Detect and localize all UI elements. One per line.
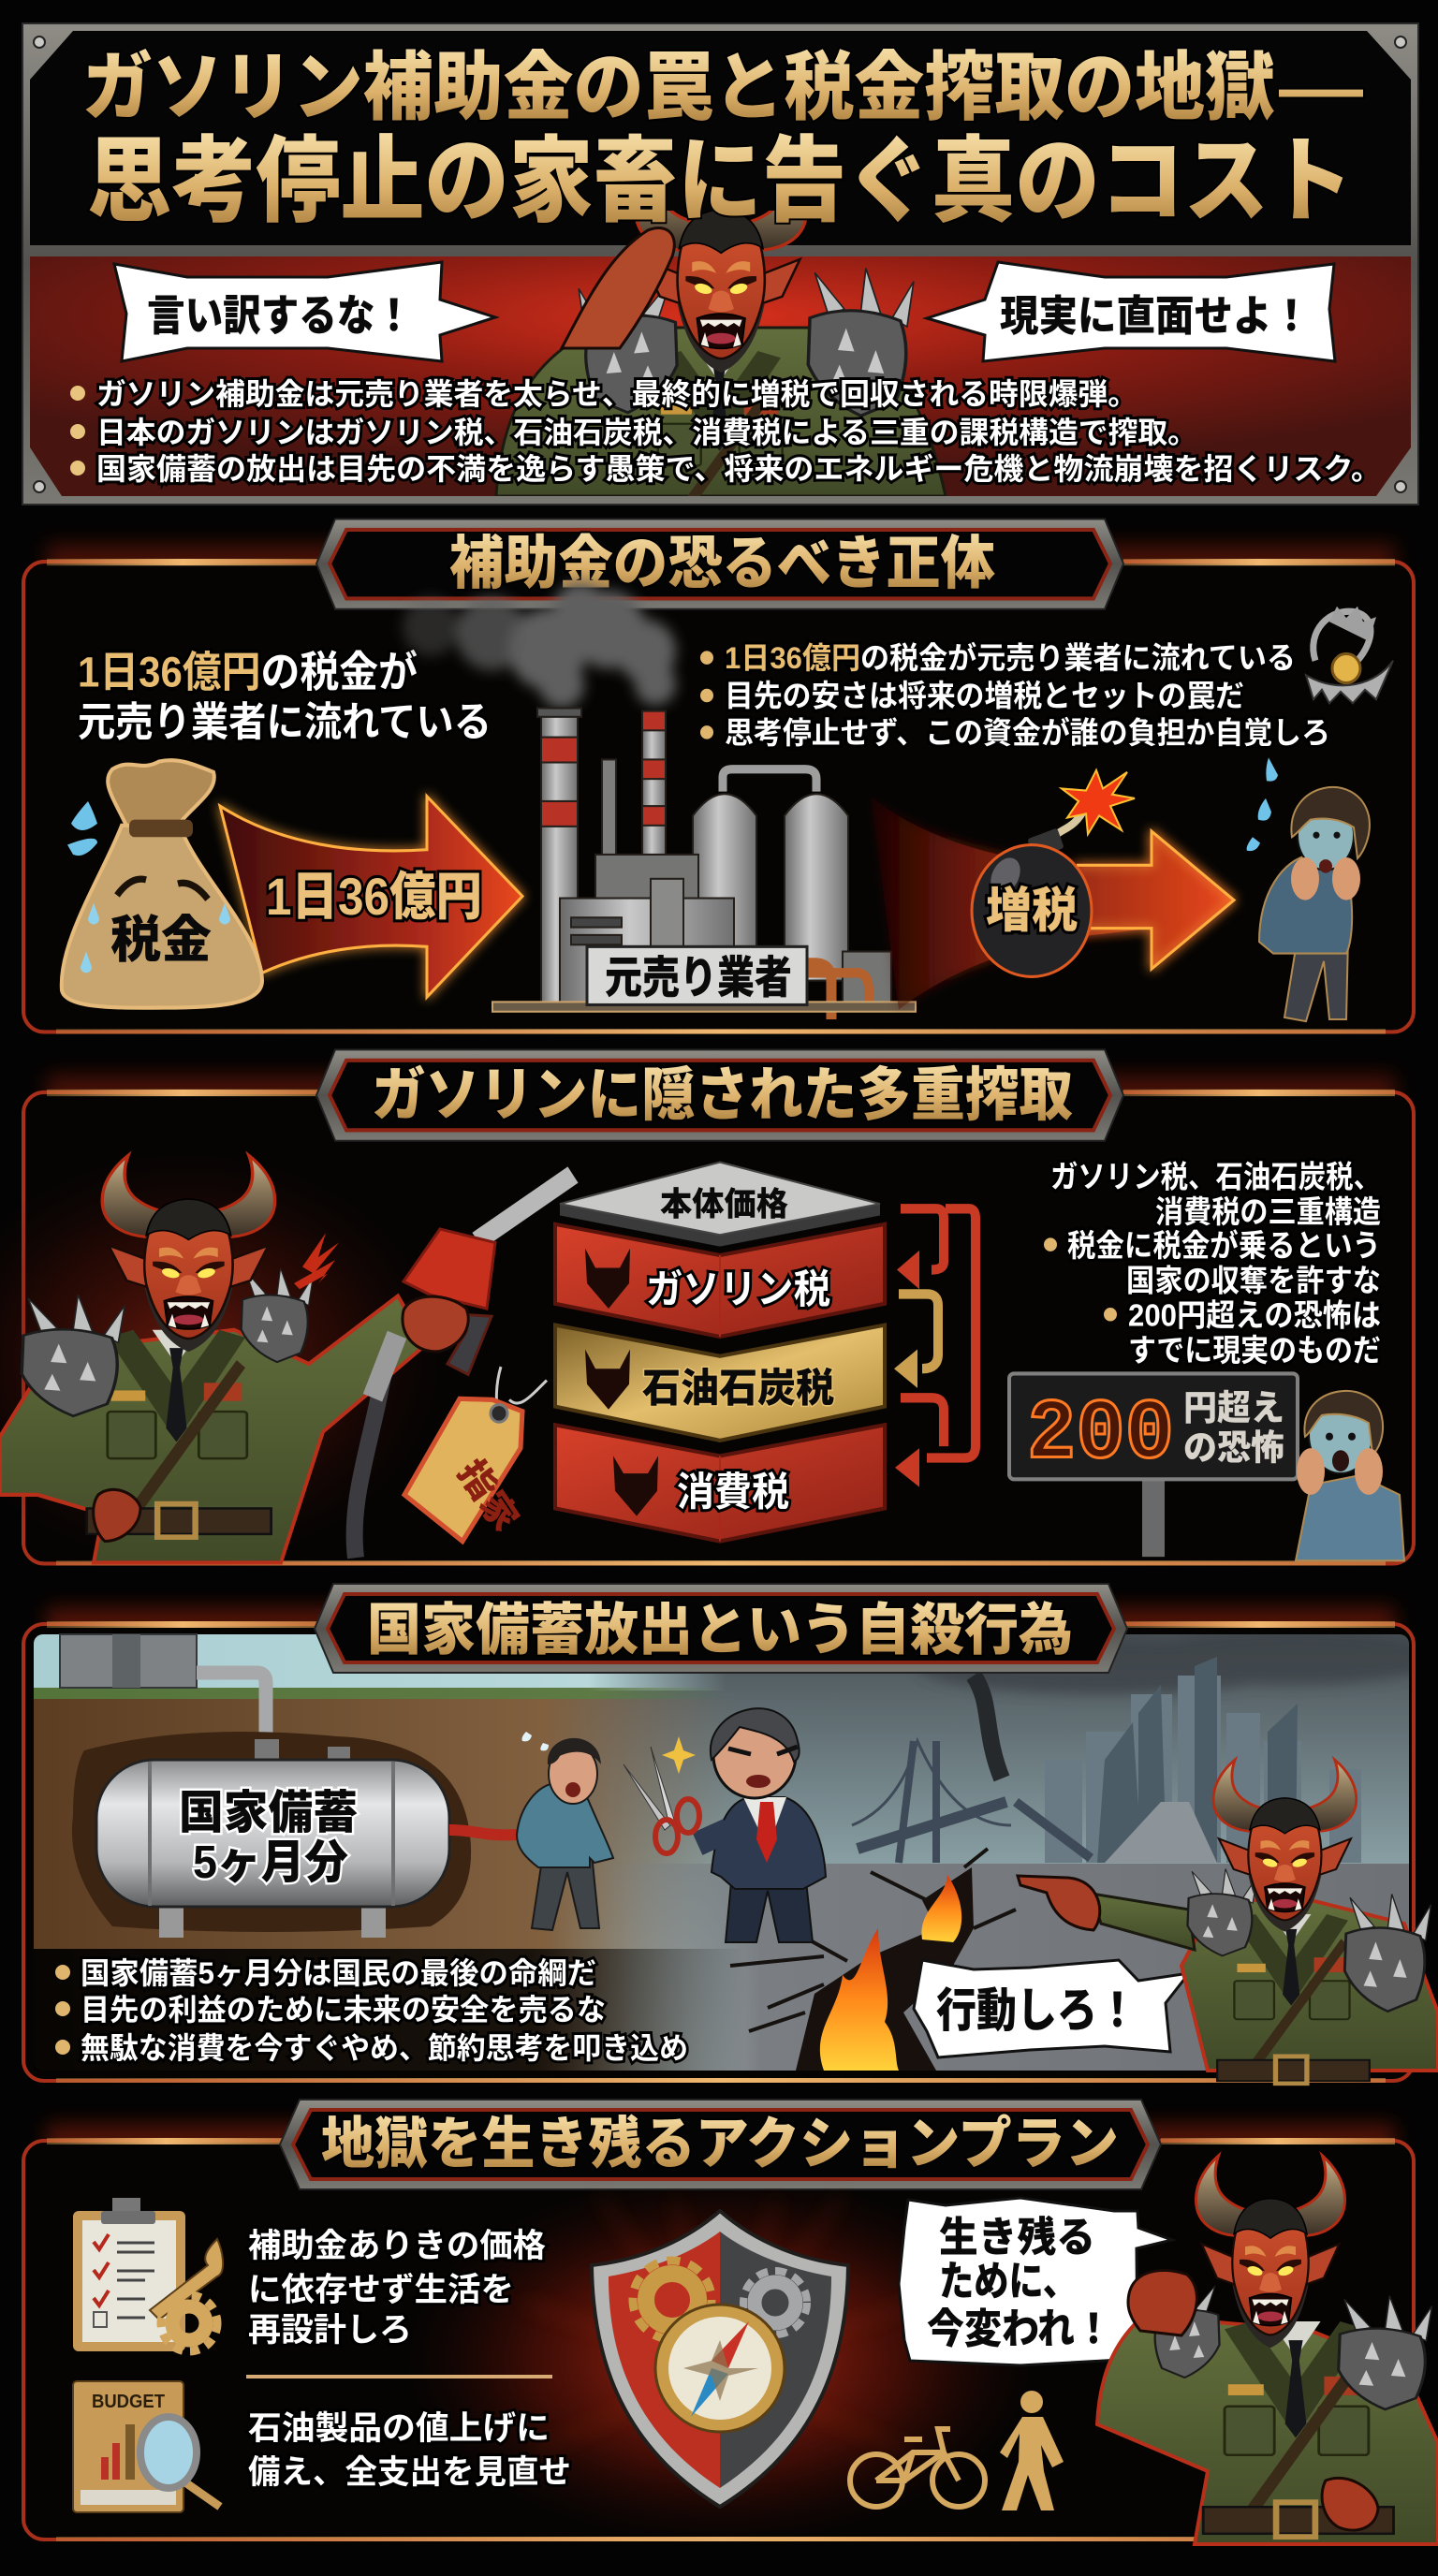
speech bubble right: 現実に直面せよ！ (1000, 292, 1311, 340)
red glow (402, 2172, 1038, 2546)
arrow head outline (1077, 831, 1234, 969)
bullet list: 目先の利益のために未来の安全を売るな (81, 1993, 606, 2027)
text: triple structure: すでに現実のものだ (1128, 1333, 1381, 1368)
icon: bomb (972, 770, 1135, 976)
layer: base price (560, 1163, 880, 1247)
layer: petroleum coal tax: 石油石炭税 (642, 1366, 834, 1411)
text: daily amount: 1日36億円の税金が (78, 649, 418, 696)
title line 1: ガソリン補助金の罠と税金搾取の地獄 (82, 46, 1275, 129)
speech bubble left: 言い訳するな！ (147, 291, 413, 340)
cavity (72, 1732, 471, 1932)
price sign: の恐怖 (1183, 1428, 1284, 1468)
text: triple structure: 消費税の三重構造 (1155, 1194, 1381, 1229)
panel: reserves (23, 1584, 1438, 2084)
scene background (34, 1629, 1438, 2071)
text: action 1: 再設計しろ (248, 2312, 412, 2349)
banner (315, 1584, 1127, 1673)
icon: walker (1000, 2391, 1064, 2510)
fuel nozzle (355, 1175, 573, 1558)
icon: money bag (62, 760, 262, 1008)
arrows: tax layering (894, 1208, 976, 1487)
corner rivets (34, 37, 1406, 492)
politician with scissors (624, 1708, 826, 1942)
speech bubble: survive: 今変われ！ (927, 2306, 1112, 2352)
layer: base price: 本体価格 (660, 1187, 788, 1223)
section frame (23, 2124, 1414, 2541)
price sign: 円超え (1183, 1389, 1284, 1427)
banner (316, 519, 1123, 609)
summary bullets: 国家備蓄の放出は目先の不満を逸らす愚策で、将来のエネルギー危機と物流崩壊を招くリスク。 (96, 452, 1381, 486)
text: daily amount: 元売り業者に流れている (78, 700, 492, 746)
text: action 2 (248, 2410, 571, 2491)
bullet list (55, 1956, 688, 2065)
tax stack diagram (555, 1163, 885, 1542)
icon: bicycle (850, 2429, 985, 2507)
bullet list: 国家備蓄5ヶ月分は国民の最後の命綱だ (81, 1956, 596, 1990)
speech bubble: survive: ために、 (939, 2259, 1078, 2305)
person scared (1296, 1391, 1404, 1560)
banner: 補助金の恐るべき正体 (449, 531, 995, 595)
layer: consumption tax: 消費税 (677, 1470, 789, 1514)
bullet list: 無駄な消費を今すぐやめ、節約思考を叩き込め (81, 2031, 688, 2065)
icon: bear trap (1306, 607, 1393, 703)
demon with fist (1097, 2156, 1438, 2544)
arrow: tax hike (871, 797, 1234, 1010)
storage tank: 5ヶ月分 (193, 1837, 348, 1888)
price tag (404, 1367, 547, 1542)
metal frame (22, 23, 1418, 505)
speech bubble left (114, 262, 495, 361)
text: action 1: に依存せず生活を (248, 2272, 514, 2308)
ground cracks and flames (730, 1849, 1016, 2071)
text: daily amount (78, 649, 492, 746)
smoke (403, 583, 676, 708)
right bullets: 思考停止せず、この資金が誰の負担か自覚しろ (725, 715, 1330, 750)
icon: checklist (73, 2198, 223, 2351)
right bullets (700, 641, 1330, 750)
summary bullets: 日本のガソリンはガソリン税、石油石炭税、消費税による三重の課税構造で搾取。 (96, 416, 1197, 449)
ruined city (852, 1657, 1361, 1863)
icon: money bag: 税金 (110, 913, 212, 969)
text overlay (34, 1949, 745, 2071)
divider (246, 2375, 552, 2378)
right bullets: 目先の安さは将来の増税とセットの罠だ (725, 679, 1244, 713)
banner (316, 1049, 1123, 1141)
section frame (23, 1607, 1414, 2083)
panel: action plan (23, 2100, 1438, 2546)
section frame (23, 1075, 1414, 1565)
title panel background (30, 31, 1411, 245)
header demon saluting (494, 211, 947, 496)
icon: refinery (492, 708, 916, 1019)
building on surface (60, 1634, 266, 1743)
red glow (0, 1146, 449, 1573)
text: triple structure: 200円超えの恐怖は (1128, 1298, 1381, 1333)
red panel background (30, 256, 1411, 496)
icon: refinery: 元売り業者 (605, 953, 792, 1003)
speech bubble: act: 行動しろ！ (936, 1984, 1137, 2037)
layer: gasoline tax (555, 1224, 885, 1337)
arrow label: 1日36億円 (266, 867, 482, 926)
text: triple structure: ガソリン税、石油石炭税、 (1050, 1160, 1381, 1194)
speech bubble: survive: 生き残る (939, 2215, 1095, 2261)
layer: gasoline tax: ガソリン税 (646, 1266, 830, 1311)
storage tank: 国家備蓄 (179, 1788, 358, 1838)
shield with compass (592, 2211, 848, 2507)
speech bubble: survive (899, 2198, 1172, 2365)
text: triple structure (1044, 1160, 1381, 1368)
icon: budget book (73, 2381, 220, 2512)
storage tank (96, 1739, 518, 1938)
text: triple structure: 税金に税金が乗るという (1067, 1228, 1381, 1263)
speech bubble right (927, 262, 1335, 361)
section frame (23, 544, 1414, 1034)
summary bullets (70, 377, 1381, 486)
demon pointing (1018, 1760, 1438, 2084)
speech bubble: act (914, 1960, 1189, 2057)
title line 1: — (1279, 46, 1363, 129)
text: action 1: 補助金ありきの価格 (248, 2228, 546, 2264)
banner: 地獄を生き残るアクションプラン (321, 2113, 1119, 2175)
banner: 国家備蓄放出という自殺行為 (367, 1599, 1073, 1661)
text: action 2: 石油製品の値上げに (248, 2410, 550, 2447)
text: action 1 (248, 2228, 546, 2349)
person coughing (517, 1732, 613, 1930)
price sign: 200 (1027, 1385, 1174, 1483)
summary bullets: ガソリン補助金は元売り業者を太らせ、最終的に増税で回収される時限爆弾。 (96, 377, 1137, 411)
rays (524, 2195, 917, 2452)
icon: bomb: 増税 (986, 884, 1078, 938)
banner (280, 2100, 1161, 2189)
text: action 2: 備え、全支出を見直せ (248, 2454, 571, 2491)
person worried (1247, 757, 1370, 1021)
header panel (22, 23, 1418, 535)
banner: ガソリンに隠された多重搾取 (372, 1062, 1073, 1127)
demon with nozzle (0, 1155, 426, 1562)
panel: subsidy (23, 519, 1414, 1034)
layer: petroleum coal tax (555, 1325, 885, 1441)
panel: multiple taxation (0, 1049, 1414, 1573)
price tag: 指家 (450, 1453, 525, 1539)
arrow: tax flow (220, 797, 522, 997)
icon: budget book: BUDGET (92, 2392, 165, 2412)
text: triple structure: 国家の収奪を許すな (1126, 1264, 1381, 1297)
price sign (1009, 1373, 1298, 1557)
right bullets: 1日36億円の税金が元売り業者に流れている (725, 641, 1296, 675)
layer: consumption tax (555, 1425, 885, 1542)
